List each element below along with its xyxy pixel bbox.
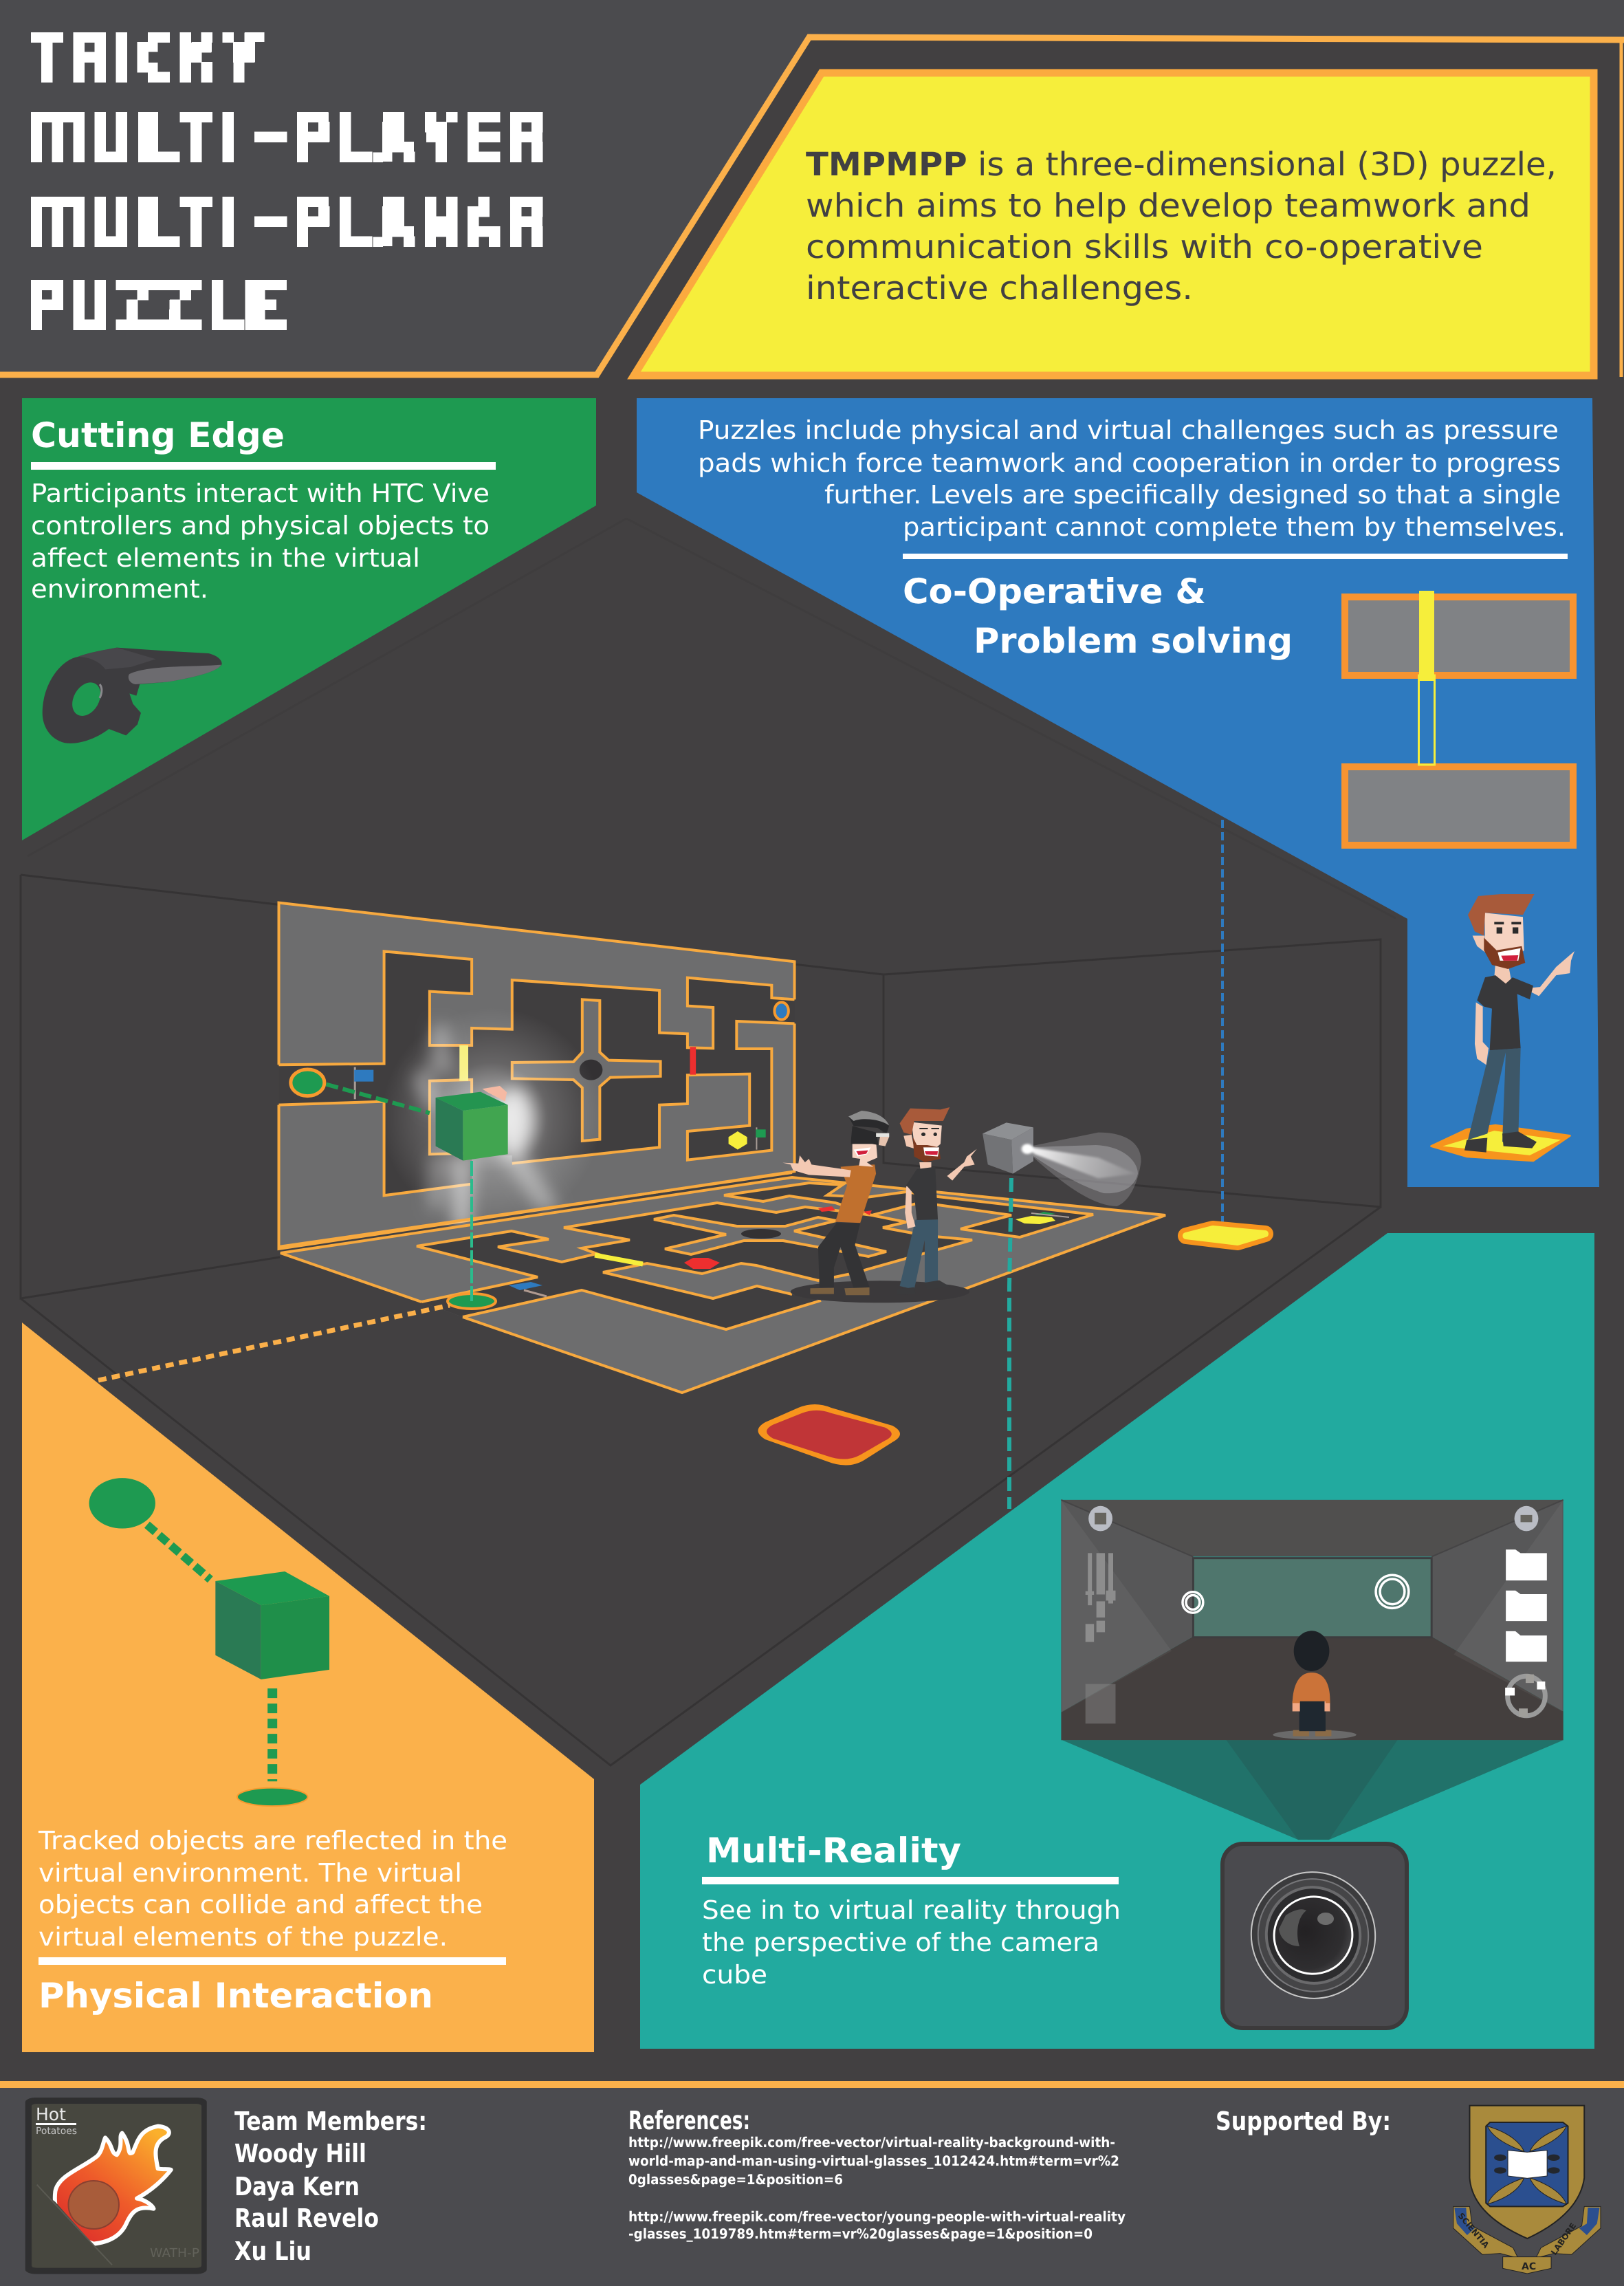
logo: hot potatoes: Potatoes: [36, 2126, 77, 2137]
header orange outline: [0, 37, 1624, 377]
panel: intro: [634, 73, 1594, 375]
body text: virtual environment. The virtual: [39, 1858, 462, 1888]
references: world-map-and-man-using-virtual-glasses_1012424.htm#term=vr%2: [628, 2153, 1119, 2169]
icon: tracked cube with target: [89, 1478, 329, 1806]
panel: physical interaction: [22, 1322, 594, 2052]
body text: pads which force teamwork and cooperation in order to progress: [698, 448, 1561, 478]
wall cube: [326, 1085, 508, 1161]
body text: [702, 1895, 1121, 1990]
floor gates and goals: [448, 1206, 1069, 1309]
body text: participant cannot complete them by themselves.: [903, 512, 1566, 542]
connector: blue dashed line: [1221, 820, 1224, 1226]
references: [628, 2106, 1126, 2242]
references: http://www.freepik.com/free-vector/virtual-reality-background-with-: [628, 2134, 1115, 2151]
floor maze: [278, 1173, 1165, 1393]
camera cube: [983, 1122, 1141, 1206]
title: PL: [287, 99, 373, 179]
controls left: [1086, 1506, 1115, 1723]
heading rule: [702, 1877, 1119, 1884]
body text: Tracked objects are reflected in the: [38, 1826, 507, 1855]
heading: physical interaction: Physical Interaction: [39, 1976, 433, 2016]
controls right: [1505, 1506, 1547, 1717]
tracking rings: [1183, 1575, 1409, 1613]
icon: VR controller: [43, 648, 222, 743]
title: -: [239, 179, 297, 259]
title: A: [376, 184, 414, 263]
heading: cutting edge: Cutting Edge: [31, 415, 285, 455]
team members: Daya Kern: [234, 2172, 360, 2201]
shadow: [791, 1281, 969, 1303]
intro text: [806, 146, 1557, 307]
references: References:: [628, 2106, 750, 2135]
logo: hot potatoes: Hot: [36, 2104, 66, 2124]
title: T: [28, 19, 66, 99]
body text: further. Levels are specifically designed so that a single: [824, 480, 1561, 510]
heading: co-operative and problem solving: Problem solving: [974, 621, 1293, 661]
body text: virtual elements of the puzzle.: [39, 1922, 448, 1952]
panel: cutting edge: [22, 398, 596, 840]
heading: multi-reality: Multi-Reality: [706, 1831, 961, 1871]
body text: Participants interact with HTC Vive: [31, 479, 490, 508]
logo: university crest: [1453, 2106, 1601, 2274]
title: m: [25, 79, 91, 184]
title: Y: [223, 19, 262, 99]
title: -: [239, 95, 297, 175]
title: A: [376, 99, 414, 179]
team members: Woody Hill: [234, 2139, 366, 2168]
figures: two players and camera cube: [782, 1107, 1141, 1303]
body text: affect elements in the virtual: [31, 543, 420, 573]
body text: Puzzles include physical and virtual challenges such as pressure: [698, 415, 1559, 445]
body text: environment.: [31, 574, 208, 604]
body text: the perspective of the camera: [702, 1928, 1099, 1957]
team members: Raul Revelo: [234, 2203, 379, 2233]
connector: orange dashed line: [98, 1305, 450, 1380]
crest motto text: AC: [1522, 2261, 1536, 2272]
title: PU: [27, 267, 113, 347]
body text: [31, 479, 490, 604]
title: R: [505, 184, 547, 263]
supported by: Supported By:: [1216, 2107, 1391, 2136]
connector: teal dashed line: [1009, 1178, 1011, 1509]
diagram: raised bridge: [1345, 591, 1573, 845]
panel: co-operative: [637, 398, 1599, 1187]
red pressure pad: [758, 1404, 900, 1466]
footer orange band: [0, 2081, 1624, 2088]
yellow pressure pad: [1186, 1229, 1265, 1242]
crest motto text: LABORE: [1549, 2221, 1578, 2257]
crest motto text: [1456, 2211, 1578, 2272]
references: http://www.freepik.com/free-vector/young-people-with-virtual-reality: [628, 2208, 1126, 2225]
body text: objects can collide and affect the: [39, 1890, 483, 1919]
title: A: [463, 184, 501, 263]
references: -glasses_1019789.htm#term=vr%20glasses&page=1&position=0: [628, 2225, 1093, 2242]
figure: user from behind: [1273, 1631, 1357, 1739]
figure: pointing man on pressure pad: [1431, 894, 1574, 1161]
title: ZZ: [113, 267, 199, 347]
team members: [234, 2107, 427, 2266]
intro text: communication skills with co-operative: [806, 228, 1483, 266]
intro text: which aims to help develop teamwork and: [806, 187, 1530, 225]
title: T: [180, 184, 219, 263]
title: N: [418, 184, 460, 263]
title: K: [180, 19, 219, 99]
body text: [698, 415, 1566, 542]
logo: hot potatoes: WATH-P: [150, 2246, 199, 2261]
room lines: [21, 519, 1396, 1765]
lens: [1235, 1856, 1392, 2014]
heading: co-operative and problem solving: [903, 572, 1293, 661]
player pointing: [897, 1107, 977, 1295]
team members: Team Members:: [234, 2107, 427, 2136]
player with VR headset: [782, 1111, 889, 1295]
logo: hot potatoes: [25, 2098, 207, 2274]
heading rule: [31, 462, 496, 470]
title: T: [180, 99, 219, 179]
connector: green dashed line: [470, 1161, 473, 1301]
crest motto text: SCIENTIA: [1456, 2211, 1491, 2250]
footer background: [0, 2088, 1624, 2286]
heading rule: [39, 1957, 506, 1965]
wall cross: [512, 999, 661, 1141]
body text: See in to virtual reality through: [702, 1895, 1121, 1925]
title: I: [222, 100, 242, 177]
flame: [55, 2126, 171, 2244]
camera cube: [1222, 1844, 1407, 2028]
body text: controllers and physical objects to: [31, 511, 490, 541]
floor puzzle: [278, 1173, 1165, 1393]
title: PL: [287, 184, 373, 263]
title: [25, 19, 547, 347]
body text: [38, 1826, 507, 1952]
panel: multi-reality: [640, 1233, 1594, 2049]
gates and goals: [291, 1002, 789, 1150]
title: R: [70, 19, 113, 99]
title: m: [25, 164, 91, 268]
title: UL: [92, 99, 177, 179]
heading: co-operative and problem solving: Co-Operative &: [903, 572, 1206, 611]
title: LE: [201, 267, 286, 347]
illustration: camera view of room: [1061, 1500, 1563, 1840]
wall panel: [279, 903, 795, 1249]
shield cross: [1486, 2122, 1568, 2206]
body text: cube: [702, 1960, 767, 1990]
references: 0glasses&page=1&position=6: [628, 2171, 843, 2188]
title: ER: [461, 99, 547, 179]
title: Y: [419, 99, 457, 179]
wall puzzle: [279, 903, 795, 1249]
intro text: TMPMPP is a three-dimensional (3D) puzzle,: [806, 146, 1557, 184]
intro text: interactive challenges.: [806, 270, 1193, 307]
title: UL: [92, 184, 177, 263]
header background: [0, 0, 1624, 375]
floor cross: [654, 1215, 886, 1256]
shield: [1469, 2106, 1584, 2239]
book: [1508, 2151, 1547, 2178]
heading rule: [903, 554, 1568, 559]
title: I: [113, 20, 133, 97]
team members: Xu Liu: [234, 2236, 311, 2266]
motto scroll: [1453, 2206, 1601, 2274]
title: I: [222, 184, 242, 261]
title: C: [135, 19, 177, 99]
glow: [382, 1008, 602, 1231]
